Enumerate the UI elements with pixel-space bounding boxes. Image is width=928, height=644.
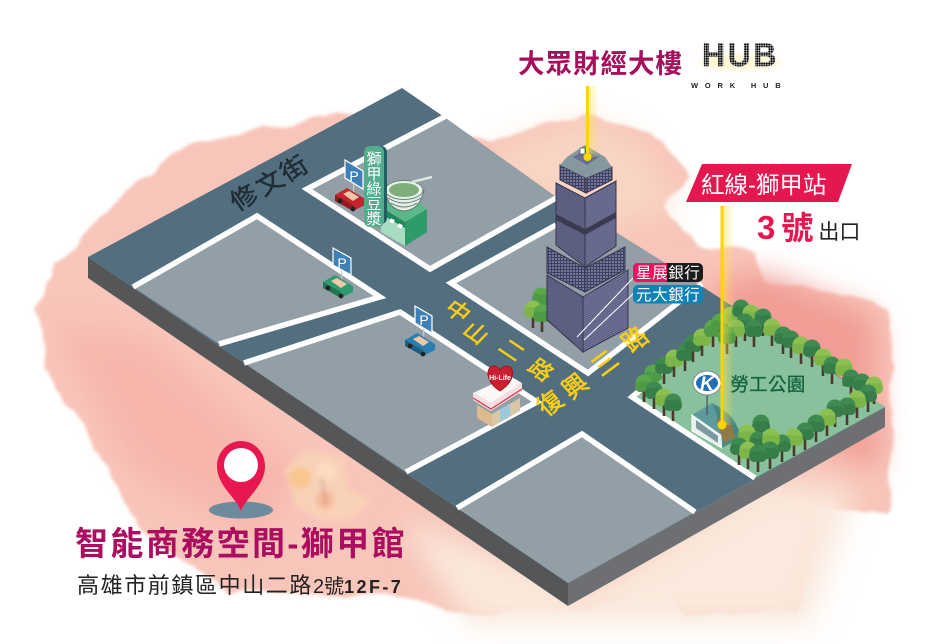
parking sign and blue car: P [419,312,429,328]
road label: 復興三路: 路 [616,322,655,358]
metro banner: 紅線-獅甲站 [701,172,826,198]
tier 1 crown [560,165,612,193]
tier 2 [556,181,616,267]
tier 4 [547,270,628,352]
park trees back row [635,300,883,412]
heading: venue name: 智能商務空間-獅甲館 [75,525,407,562]
road label: 中山二路: 中 [439,295,476,327]
road label: 修文街 [225,151,314,216]
HUB logo: WORK HUB [691,81,787,90]
right pink wash [700,270,880,470]
left side wall [88,257,568,606]
watercolor background [38,112,893,625]
right side wall [568,407,885,606]
parking sign and green car [323,248,353,298]
block: west [133,216,380,344]
road label: 復興三路: 復 [531,386,570,422]
block: tower [451,225,702,373]
bowl [385,177,432,211]
parking sign and green car: P [337,255,347,271]
road label: 復興三路: 三 [587,347,625,382]
title: building name: 大眾財經大樓 [518,49,683,79]
tier 3 [547,247,625,292]
pill: 星展銀行: 星展銀行 [636,264,700,282]
address: 高雄市前鎮區中山二路2號12F-7 [77,573,403,598]
location pin [209,441,273,518]
vertical shop sign: 獅 [366,151,382,168]
metro banner [686,164,852,202]
office tower [547,145,628,352]
pill: 元大銀行: 元大銀行 [636,286,700,304]
road label: 中山二路: 二 [493,334,530,366]
heart logo: Hi-Life [489,375,511,382]
bottom pale wash [400,480,855,625]
watercolor flower [285,450,372,520]
road label: 復興三路: 興 [556,369,595,405]
city blocks [133,116,885,583]
dessert shop with bowl [364,146,432,246]
metro K logo [693,371,721,415]
road surface [88,88,885,583]
top peach wash [490,118,680,230]
block: Hi-Life store [244,312,537,472]
road label: 修文街: 文 [251,165,290,201]
road label: 中山二路: 路 [522,354,560,386]
park lawn [632,310,885,478]
vertical shop sign: 豆 [366,196,382,213]
road label: 復興三路 [531,322,655,422]
parking sign and red car: P [349,168,359,184]
shop building [379,193,427,246]
park label: 勞工公園: 勞工公園 [730,374,806,395]
yellow pointer: tower [584,86,599,161]
metro K logo: K [700,374,715,395]
exit number: 3號出口 [757,209,860,246]
vertical shop sign: 綠 [366,181,382,198]
road label: 中山二路: 山 [457,317,494,349]
Hi-Life convenience store [473,366,522,427]
roof [560,145,612,178]
isometric base block [88,88,885,606]
vertical shop sign: 漿 [366,211,382,228]
vertical shop sign [364,146,387,228]
parking sign and red car [335,160,365,211]
parking sign and blue car [405,306,435,356]
trees beside tower [524,288,551,332]
HUB logo [691,37,787,90]
road label: 修文街: 街 [275,151,314,187]
HUB logo: HUB [702,37,779,73]
left pink wash [55,325,300,540]
road label: 中山二路 [439,295,560,386]
road label: 修文街: 修 [225,180,264,216]
yellow pointer: metro exit [718,206,734,430]
park trees front row [635,374,866,472]
vertical shop sign: 甲 [366,166,382,183]
metro entrance [692,403,740,448]
bank leader lines [577,277,634,340]
block: south [457,434,695,583]
block: north with dessert shop [307,116,558,269]
